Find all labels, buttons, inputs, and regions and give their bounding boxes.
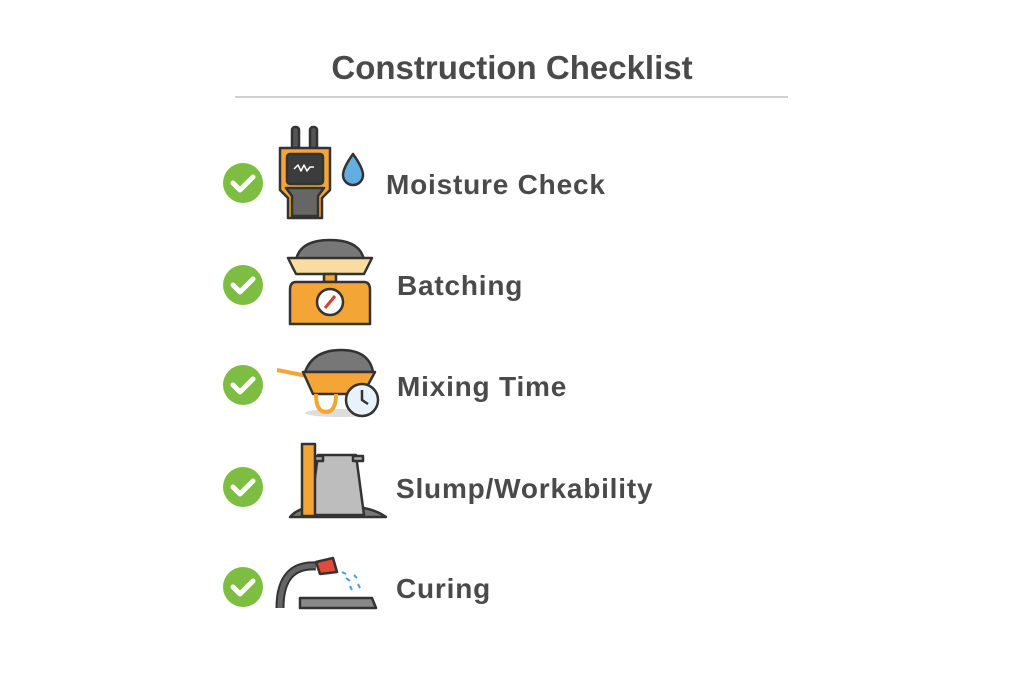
icon: hose and slab — [280, 558, 376, 608]
check icon — [223, 163, 263, 203]
check icon — [223, 567, 263, 607]
icon: slump cone — [290, 444, 386, 517]
check icon — [223, 365, 263, 405]
checklist item: Batching — [223, 240, 523, 324]
icon: scale — [288, 240, 372, 324]
check icon — [223, 467, 263, 507]
checklist item: Mixing Time — [223, 350, 567, 417]
title: Construction Checklist — [331, 49, 693, 86]
label: Batching — [397, 270, 523, 301]
icon: moisture meter — [280, 127, 363, 218]
check icon — [223, 265, 263, 305]
label: Slump/Workability — [396, 473, 653, 504]
icon: wheelbarrow with clock — [277, 350, 378, 417]
label: Curing — [396, 573, 491, 604]
checklist item: Moisture Check — [223, 127, 606, 218]
checklist item: Slump/Workability — [223, 444, 653, 517]
label: Moisture Check — [386, 169, 606, 200]
checklist item: Curing — [223, 558, 491, 608]
label: Mixing Time — [397, 371, 567, 402]
